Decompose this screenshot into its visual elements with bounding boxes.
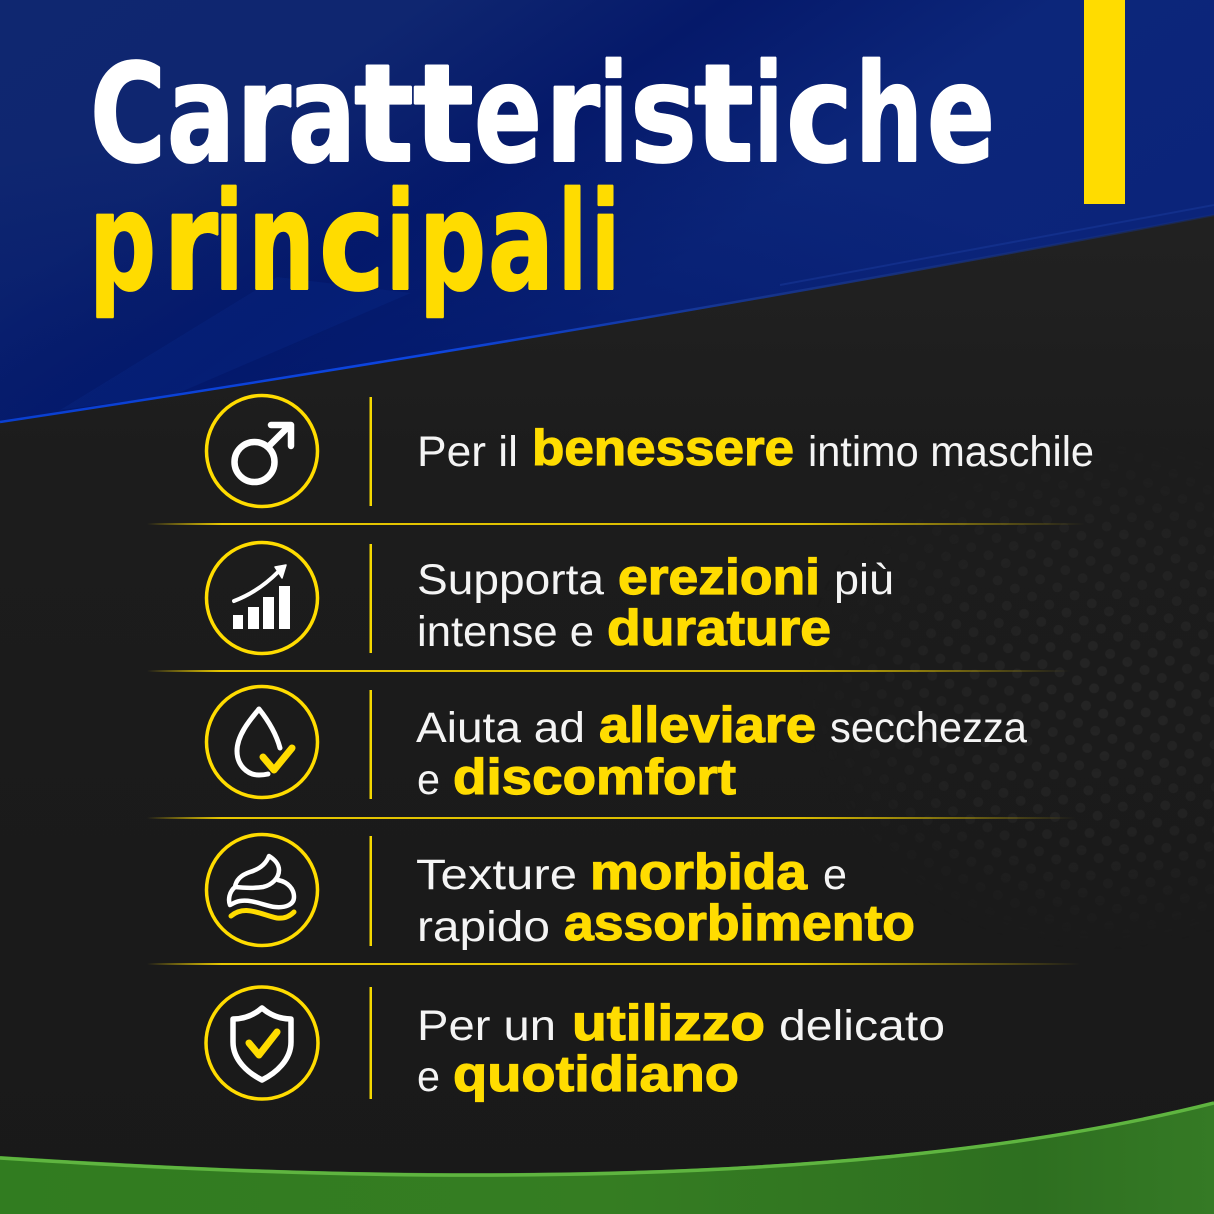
title: t bbox=[694, 36, 754, 194]
text: row 2: più bbox=[834, 556, 894, 604]
text: row 5: delicato bbox=[779, 1002, 945, 1050]
vertical divider bbox=[370, 987, 372, 1099]
text: row 1: Per il bbox=[417, 428, 518, 476]
text: row 2: intense e bbox=[417, 608, 594, 656]
icon: cream swirl bbox=[206, 834, 318, 946]
text: row 4: morbida bbox=[590, 844, 808, 900]
text: row 2 bbox=[417, 549, 894, 656]
vertical divider bbox=[370, 544, 372, 653]
text: row 4: Texture bbox=[416, 851, 577, 899]
dotted texture bbox=[989, 624, 1186, 794]
text: row 5: utilizzo bbox=[572, 995, 765, 1051]
text: row 3: discomfort bbox=[453, 749, 736, 805]
text: row 3 bbox=[416, 697, 1027, 805]
title: r bbox=[545, 36, 600, 194]
icon: rising bar chart bbox=[206, 542, 318, 654]
text: row 3: secchezza bbox=[830, 704, 1027, 752]
title: i bbox=[754, 36, 783, 194]
title: t bbox=[413, 36, 474, 194]
title: i bbox=[599, 36, 628, 194]
title: c bbox=[319, 164, 385, 322]
icon: shield with check bbox=[206, 987, 318, 1099]
text: row 3: e bbox=[417, 756, 440, 804]
title: i bbox=[215, 164, 243, 322]
row 3: dryness bbox=[206, 686, 1027, 805]
title bbox=[89, 36, 995, 322]
icon: water drop with check bbox=[206, 686, 318, 798]
title: i bbox=[386, 164, 415, 322]
text: row 4: e bbox=[823, 851, 847, 899]
title: e bbox=[927, 36, 995, 194]
title: n bbox=[248, 164, 315, 322]
text: row 5: Per un bbox=[417, 1002, 556, 1050]
title: C bbox=[90, 36, 166, 194]
title: c bbox=[786, 36, 853, 194]
title: a bbox=[167, 36, 235, 194]
text: row 4: assorbimento bbox=[564, 895, 915, 951]
title: p bbox=[89, 164, 156, 322]
text: row 5: e bbox=[417, 1053, 440, 1101]
vertical divider bbox=[370, 690, 372, 799]
icon: male symbol bbox=[206, 396, 318, 506]
title: h bbox=[855, 36, 923, 194]
text: row 3: alleviare bbox=[599, 697, 816, 753]
text: row 1: benessere bbox=[532, 420, 794, 476]
title: t bbox=[354, 36, 414, 194]
text: row 4 bbox=[416, 844, 915, 951]
text: row 2: erezioni bbox=[618, 549, 820, 605]
vertical divider bbox=[370, 397, 372, 506]
title: a bbox=[488, 164, 554, 322]
row 1: wellbeing bbox=[206, 396, 1094, 506]
title: a bbox=[288, 36, 356, 194]
title: l bbox=[558, 164, 587, 322]
text: row 4: rapido bbox=[417, 903, 550, 951]
text: row 3: Aiuta ad bbox=[416, 704, 585, 752]
text: row 1 bbox=[417, 420, 1094, 476]
text: row 5: quotidiano bbox=[453, 1046, 739, 1102]
text: row 5 bbox=[417, 995, 945, 1102]
yellow accent bar bbox=[1084, 0, 1125, 204]
title: r bbox=[163, 164, 218, 322]
vertical divider bbox=[370, 836, 372, 946]
title: s bbox=[630, 36, 697, 194]
blue header panel bbox=[0, 0, 1214, 422]
green footer band bbox=[0, 1102, 1214, 1214]
row dividers bbox=[147, 523, 1085, 965]
title: p bbox=[419, 164, 486, 322]
text: row 2: Supporta bbox=[417, 556, 604, 604]
row 2: erections bbox=[206, 542, 894, 656]
title: i bbox=[591, 164, 620, 322]
row 4: texture bbox=[206, 834, 915, 951]
title: e bbox=[474, 36, 542, 194]
row 5: daily use bbox=[206, 987, 945, 1102]
text: row 1: intimo maschile bbox=[808, 428, 1094, 476]
text: row 2: durature bbox=[607, 600, 831, 656]
title: r bbox=[236, 36, 291, 194]
